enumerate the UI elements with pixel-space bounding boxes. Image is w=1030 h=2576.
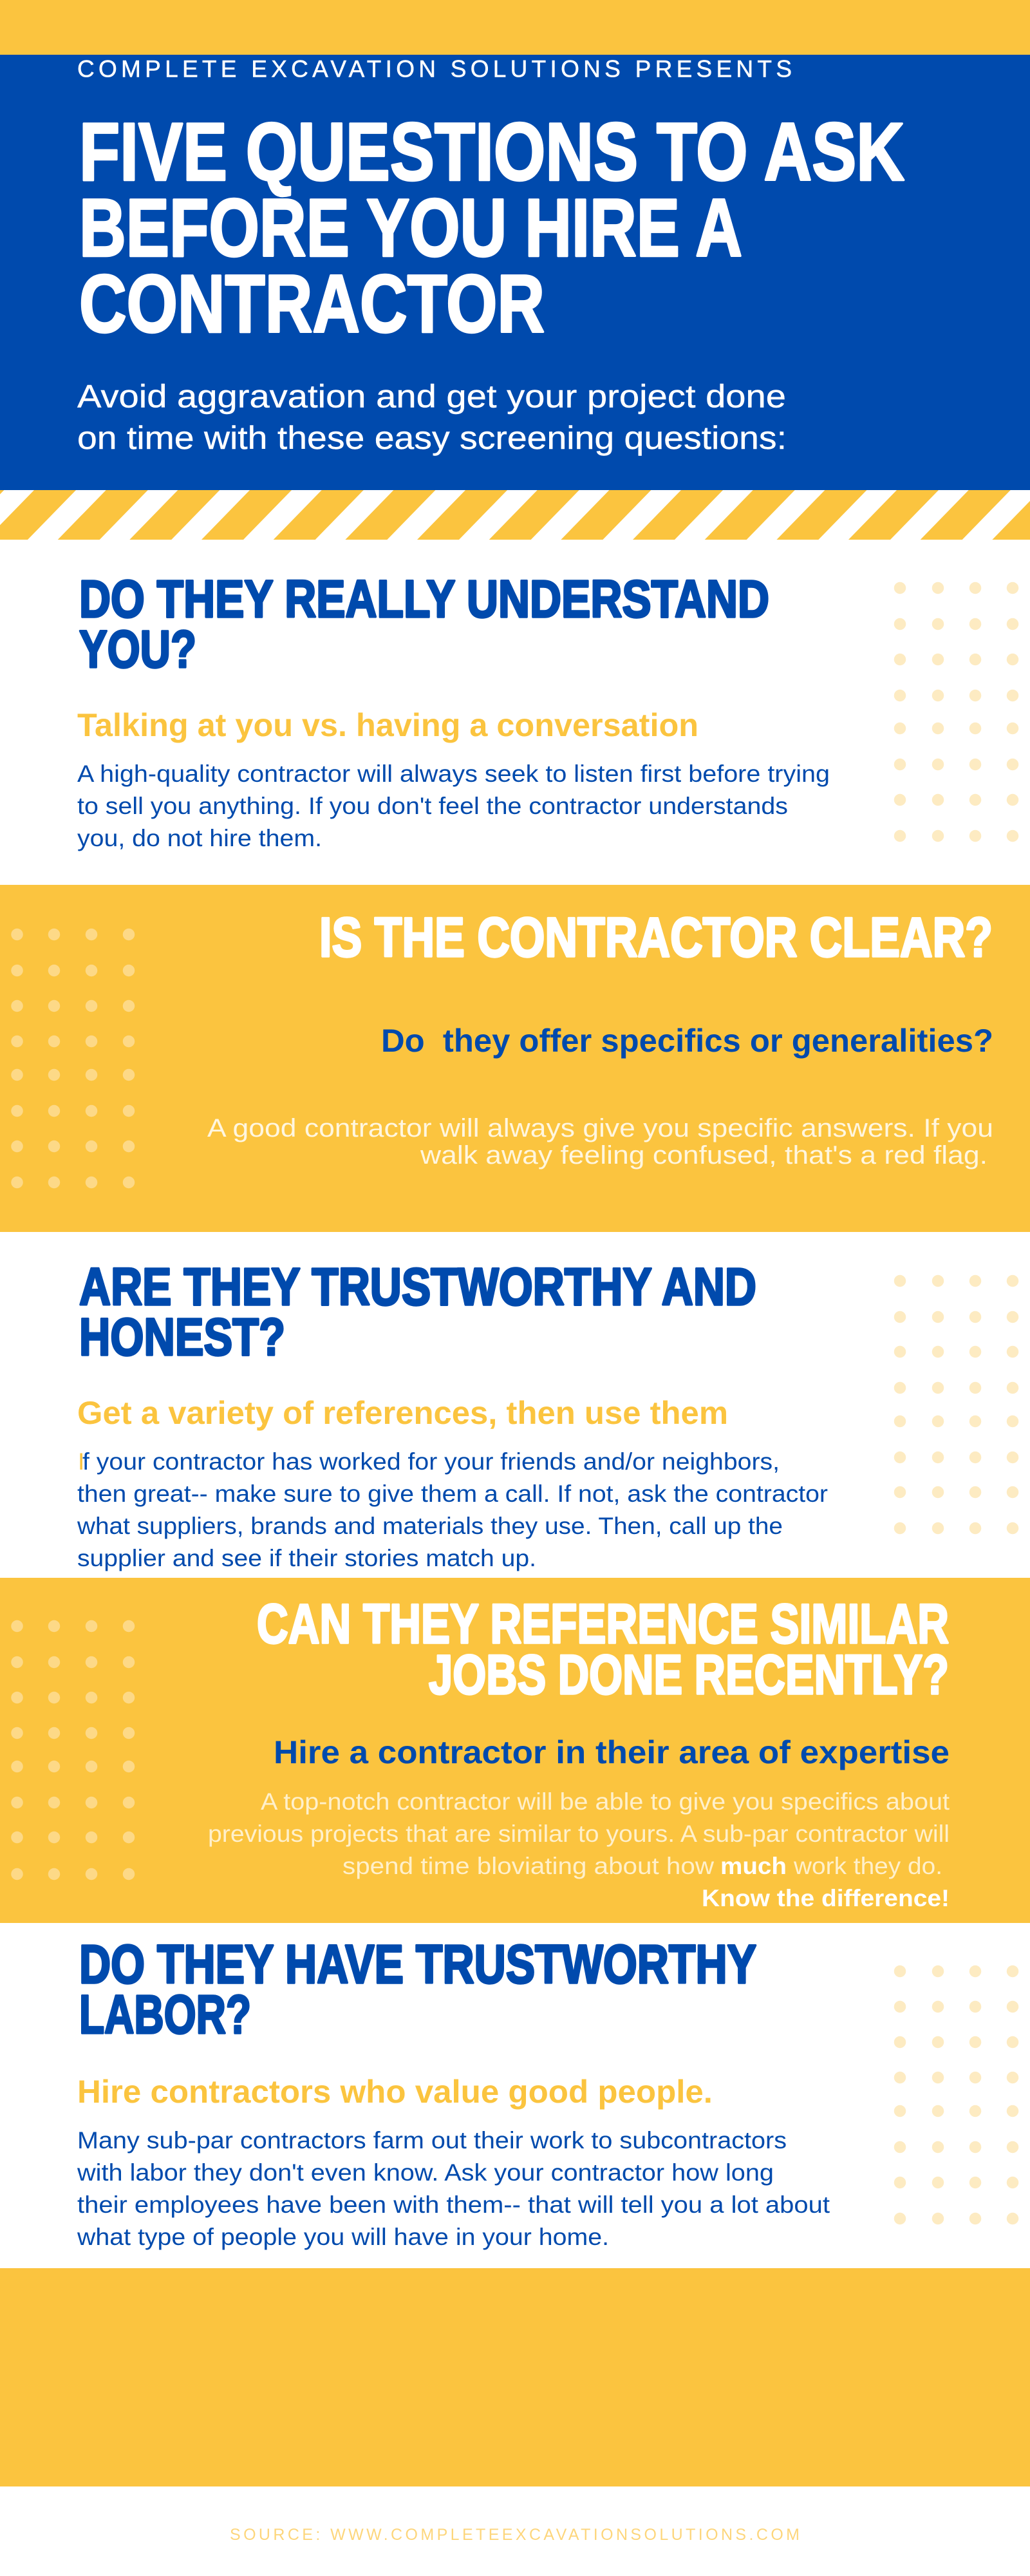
dot pattern (900, 1971, 1013, 2219)
dot pattern (17, 934, 129, 1182)
body text (207, 1114, 993, 1170)
body text: A good contractor will always give you specific answers. If you (207, 1114, 993, 1142)
body text: walk away feeling confused, that's a red flag. (420, 1141, 988, 1170)
subheading: Do they offer specifics or generalities? (381, 1023, 993, 1059)
body text: Know the difference! (702, 1885, 950, 1911)
header background (0, 55, 1030, 490)
dot pattern (900, 1281, 1013, 1528)
panel: question 1 (77, 570, 1013, 851)
body text: you, do not hire them. (77, 825, 322, 851)
heading: LABOR? (79, 1984, 251, 2045)
body text: to sell you anything. If you don't feel the contractor understands (77, 793, 788, 819)
body text: I (78, 1448, 84, 1475)
top yellow band (0, 0, 1030, 55)
body text: spend time bloviating about how (342, 1853, 714, 1879)
body text: A top-notch contractor will be able to give you specifics about (261, 1788, 950, 1815)
subtitle: Avoid aggravation and get your project done (77, 379, 786, 415)
body text: what suppliers, brands and materials they use. Then, call up the (77, 1513, 783, 1539)
dot pattern (900, 588, 1013, 836)
body text (208, 1788, 950, 1911)
body text (77, 1448, 828, 1571)
body text: much (720, 1853, 787, 1879)
title: BEFORE YOU HIRE A (79, 182, 742, 273)
body text: then great-- make sure to give them a call. If not, ask the contractor (77, 1481, 828, 1507)
panel background (0, 885, 1030, 1232)
panel: header (0, 55, 1030, 490)
panel: question 2 (0, 885, 1030, 1232)
heading (257, 1593, 949, 1706)
title (79, 106, 904, 349)
panel background (0, 1578, 1030, 1923)
heading (79, 1934, 756, 2045)
heading: YOU? (79, 620, 196, 679)
body text (77, 2127, 830, 2250)
body text: supplier and see if their stories match up. (77, 1545, 536, 1571)
subheading: Hire a contractor in their area of expertise (274, 1734, 950, 1770)
subheading: Hire contractors who value good people. (77, 2074, 713, 2110)
heading: HONEST? (79, 1308, 285, 1367)
subtitle: on time with these easy screening questions: (77, 420, 787, 456)
heading: DO THEY HAVE TRUSTWORTHY (79, 1934, 756, 1994)
presenter line: COMPLETE EXCAVATION SOLUTIONS PRESENTS (77, 55, 792, 82)
heading (79, 570, 769, 679)
body text: A high-quality contractor will always seek to listen first before trying (77, 761, 830, 787)
body text: their employees have been with them-- that will tell you a lot about (77, 2192, 830, 2218)
body text: Many sub-par contractors farm out their work to subcontractors (77, 2127, 787, 2154)
heading: DO THEY REALLY UNDERSTAND (79, 570, 769, 629)
subheading: Get a variety of references, then use them (77, 1395, 728, 1431)
panel: question 3 (77, 1258, 1013, 1571)
source line: SOURCE: WWW.COMPLETEEXCAVATIONSOLUTIONS.COM (230, 2526, 800, 2544)
dot pattern (17, 1626, 129, 1874)
panel: question 4 (0, 1578, 1030, 1923)
body text: with labor they don't even know. Ask your contractor how long (77, 2159, 774, 2186)
title: CONTRACTOR (79, 258, 545, 349)
panel: question 5 (77, 1934, 1013, 2250)
body text: work they do. (793, 1853, 942, 1879)
heading: ARE THEY TRUSTWORTHY AND (79, 1258, 756, 1316)
subheading: Talking at you vs. having a conversation (77, 707, 698, 743)
body text: f your contractor has worked for your friends and/or neighbors, (82, 1448, 780, 1475)
body text: what type of people you will have in your home. (77, 2224, 609, 2250)
heading (79, 1258, 756, 1367)
subtitle (77, 379, 787, 456)
body text: previous projects that are similar to yours. A sub-par contractor will (208, 1821, 950, 1847)
bottom yellow band (0, 2268, 1030, 2486)
hazard stripe band (0, 490, 1030, 540)
body text (77, 761, 830, 851)
